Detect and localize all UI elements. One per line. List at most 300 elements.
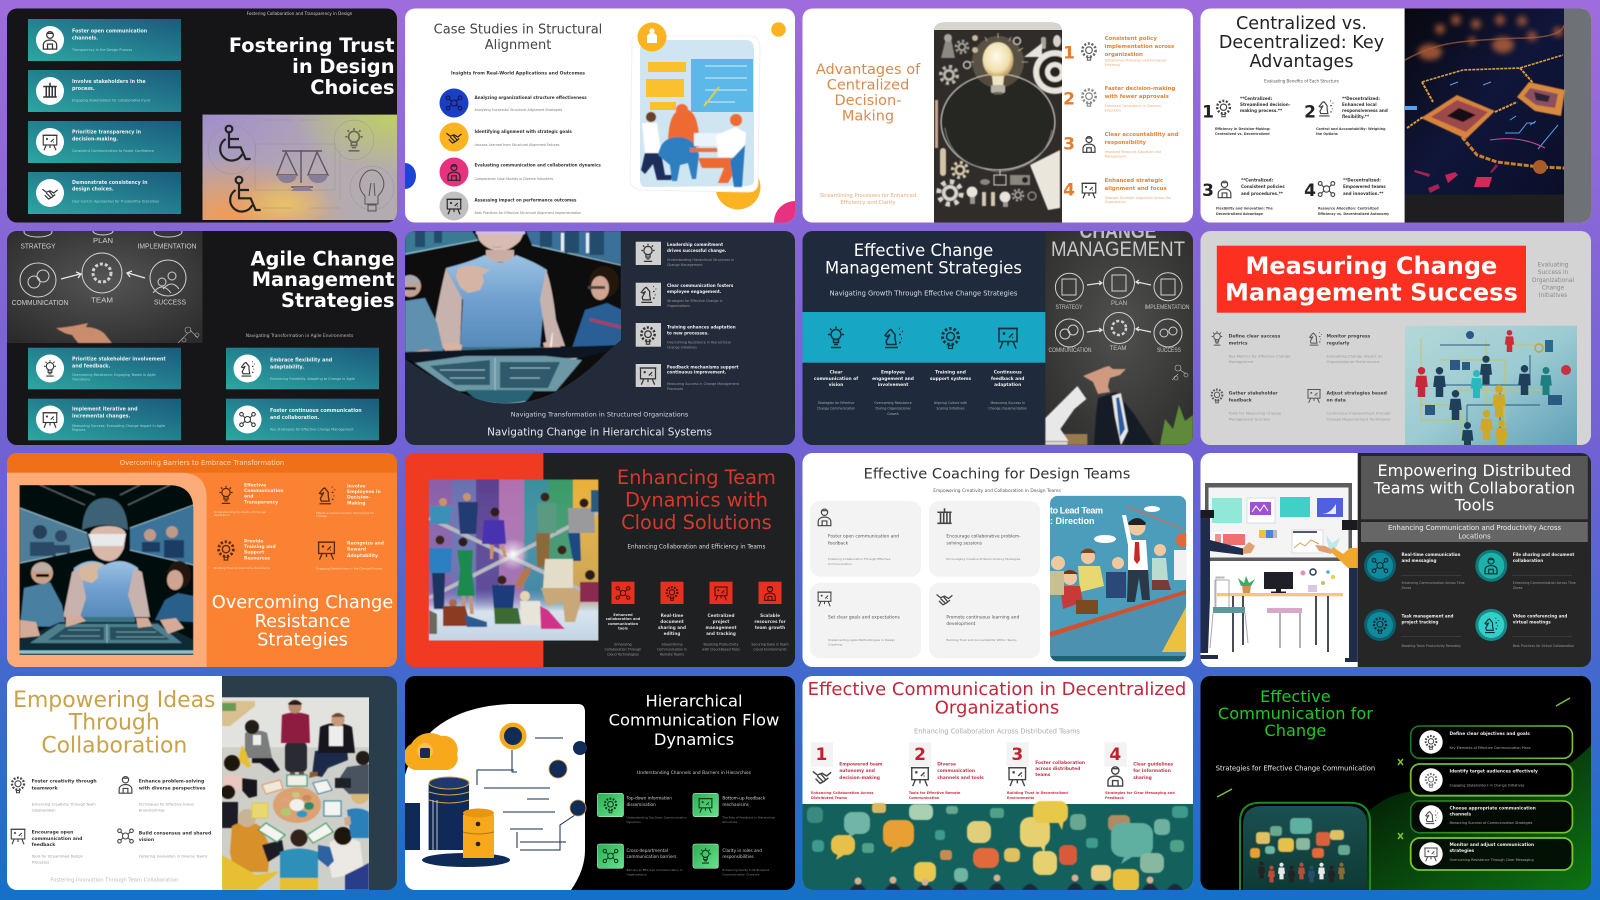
item 2: Enhance problem-solving [139,779,204,785]
card: flexibility: Embrace flexibility and [270,358,333,364]
item 2: Identifying alignment with strategic goals [474,129,572,134]
item 4: virtual meetings [1513,619,1551,624]
column 1 [814,370,858,410]
item 4: Organization [1105,200,1126,204]
item 4 [440,192,581,220]
column 2 [872,370,914,416]
item 4 [693,844,769,877]
item 2: Brainstorming [139,809,164,813]
item 1 [1411,726,1572,758]
title: Management [252,268,394,291]
item 4: Adaptability [347,553,378,559]
item 1: Foster creativity through [32,779,97,785]
item 1: Understanding Top-Down Communication [626,816,687,820]
image: chalkboard change management [1045,220,1193,445]
card: consistency: User-Centric Approaches for Trustworthy Outcomes [72,200,159,204]
column 3: Training and [935,370,966,376]
item 4: Monitor and adjust communication [1450,842,1534,848]
card 2 [929,501,1040,577]
panel: Centralized vs. Decentralized [1200,8,1591,222]
item 2: The Role of Feedback in Hierarchical [721,816,775,820]
item 1: Management [1229,359,1254,364]
panel: Hierarchical Communication Flow Dynamics [404,676,795,890]
subtitle: Navigating Growth Through Effective Change Strategies [830,290,1018,298]
item 3: Evaluating communication and collaboration dynamics [474,162,601,168]
item 1: Streamlined Processes and Increased [1105,58,1166,62]
item 3: channels [1450,812,1472,818]
panel: Case Studies in Structural Alignment [405,8,795,222]
panel: Agile Change Management Strategies [7,227,397,445]
item 1: Streamlined decision- [1240,102,1291,107]
panel: Overcoming Change Resistance Strategies [7,453,397,667]
item 2: Techniques for Effective Group [138,803,194,807]
column 2: Remote Teams [660,652,684,656]
card: iterative changes: Implement iterative and [72,407,138,413]
card: flexibility: Embracing Flexibility: Adapting to Change in Agile [270,377,355,381]
card 4 [929,583,1040,658]
item 1: autonomy and [839,768,875,774]
title: Effective Coaching for Design Teams [864,466,1130,482]
card: open communication: Transparency in the Design Process [71,48,132,52]
item 2: collaboration [1513,558,1543,563]
item 3: Consistent policies [1241,184,1285,189]
item 1 [1212,331,1291,364]
panel: Fostering Trust in Design Choices [7,8,397,222]
item 3 [636,323,736,350]
subtitle: Strategies for Effective Change Communication [1216,765,1375,773]
item 2: 2 [1304,102,1316,122]
card: stakeholder involvement: and feedback. [72,363,110,369]
image: chalkboard diagram: STRATEGY [20,244,56,250]
item 4: Adjust strategies based [1326,390,1387,396]
item 2: Effective Communication Techniques for [316,511,375,515]
item 3: Decentralized Advantage [1216,212,1264,216]
card 4: development [946,621,976,627]
title: Effective Change [854,241,993,260]
item 4: Best Practices for Effective Structural Alignment Implementation [474,211,581,215]
item 4: strategies [1450,848,1475,854]
item 2 [1063,86,1175,112]
item 2: Enhanced Consistency in Decision [1105,104,1161,108]
column 1: Clear [830,370,843,376]
card: open communication [28,19,181,61]
item 1: Key Metrics for Effective Change [1229,353,1291,358]
title: Management Strategies [825,258,1022,277]
item 4: Continuous Improvement through [1326,411,1391,416]
item 3: Training and [244,544,276,550]
column 4: Securing Data in Team [751,642,789,646]
item 4: Efficiency vs. Decentralized Autonomy [1318,212,1390,216]
card: flexibility: adaptability. [270,364,304,370]
item 1: Understanding the Roots of Change [214,510,266,514]
item 1: and messaging [1402,558,1436,563]
card 3 [810,583,921,658]
item 1 [1063,36,1174,67]
column 1: Collaboration Through [605,648,641,652]
item 1: metrics [1229,340,1248,346]
title: Resistance [255,611,350,632]
item 4: Build consensus and shared [139,831,211,837]
column 3: Scaling Initiatives [936,406,965,410]
card: transparency: Prioritize transparency in [72,130,142,136]
item 2: Identify target audiences effectively [1450,768,1538,774]
card: consistency [28,172,181,214]
image: light bulb and tools [934,22,1062,222]
card: involve stakeholders [28,70,181,112]
column 1: tools [618,626,628,630]
item 1: 1 [815,745,827,765]
subtitle band: Locations [1458,533,1491,541]
card: continuous communication: and collaboration. [270,415,319,421]
item 2 [440,122,572,152]
title: Empowering Ideas [13,688,215,713]
image: leader with futuristic visor [19,485,194,655]
subtitle band [1361,522,1588,542]
item 3 [440,158,601,186]
item 3 [1212,390,1282,421]
image: team climbing cartoon: : Direction [1050,516,1095,526]
card: flexibility [226,348,379,389]
title: Enhancing Team [617,466,776,489]
card: open communication: Foster open communication [72,29,148,35]
item 4: continuous improvement. [667,370,727,374]
title: Advantages of [816,62,921,78]
subtitle: Overcoming Barriers to Embrace Transformation [120,459,284,467]
item 2: Tools for Effective Remote [909,791,961,795]
item 2: Clear communication fosters [667,283,734,288]
item 1: Communication [244,488,283,494]
item 1: Transparency [244,499,278,505]
column 4 [988,370,1027,410]
column 2: sharing and [658,625,686,630]
panel: Empowering Distributed Teams [1200,453,1592,667]
teal icon band [802,312,1046,363]
title banner: Management Success [1225,279,1518,307]
item 3: Support [244,550,265,556]
item 1: 1 [1202,102,1214,122]
side strip [1564,8,1591,222]
item 4: Communication Channels [722,873,760,877]
item 2: the Options [1316,132,1338,136]
item 2: Evaluating Change Impact on [1326,353,1383,358]
item 2 [909,742,984,800]
item 2: with diverse perspectives [139,786,206,792]
item 3: Provide [244,538,263,544]
title: Strategies [281,289,394,312]
item 3: Flexibility and Innovation: The [1216,206,1274,210]
image: team climbing cartoon: to Lead Team [1050,505,1103,515]
item 2: Enhanced local [1342,102,1377,107]
item 4: 4 [1304,181,1316,201]
subtitle: Understanding Channels and Barriers in Hierarchies [637,770,752,776]
item 3 [1364,609,1461,648]
item 2: Enhancing Communication Across Time [1513,581,1576,585]
item 4 [1104,742,1175,800]
item 2: Execution [1105,108,1121,112]
column 2: involvement [878,382,908,388]
item 2: Zones [1513,586,1523,590]
item 4: Assessing impact on performance outcomes [474,198,577,202]
item 4: and innovation.** [1343,191,1384,196]
item 1: Distributed Teams [811,796,847,800]
column 1: Cloud Technologies [607,652,639,656]
item 1: 1 [1063,44,1075,64]
column 2: Growth [887,412,899,416]
item 3: Environments [1007,796,1034,800]
item 1: Key Elements of Effective Communication Plans [1450,746,1531,750]
title: Fostering Trust [229,34,394,57]
item 2 [316,483,381,518]
image: chalkboard change management: SUCCESS [1157,348,1181,354]
title: Dynamics [654,730,734,749]
item 3: Organizations [626,873,647,877]
card: involve stakeholders: Engaging Stakeholders for Collaborative Input [72,98,151,102]
column 3: support systems [930,376,971,382]
item 2: **Decentralized: [1342,96,1380,101]
item 1 [811,742,883,800]
item 3: Choose appropriate communication [1450,806,1536,812]
item 3 [1411,801,1572,833]
item 1: making process.** [1240,108,1283,113]
item 2: Monitor progress [1326,333,1371,339]
item 2: responsiveness and [1342,108,1388,113]
column 1: Change Communication [817,406,855,410]
item 1: Enhancing Collaboration Across [811,791,874,795]
item 3: Management Success [1229,416,1270,421]
image: chalkboard change management: PLAN [1111,301,1127,307]
column 4: Scalable [760,613,780,618]
item 1: Enhancing Creativity Through Team [32,803,96,807]
title: Effective Communication in Decentralized [808,679,1186,700]
card 1: feedback [828,540,849,546]
column 2: engagement and [872,376,914,382]
card: consistency: design choices. [72,187,114,193]
item 2: Communication [909,796,940,800]
item 4: Empowered teams [1343,184,1386,189]
item 4: for information [1133,768,1171,774]
item 1: Zones [1402,586,1412,590]
title banner: Measuring Change [1245,252,1497,280]
column 2: Real-time [661,613,684,618]
title: Centralized vs. [1236,14,1367,34]
item 2 [1411,764,1572,796]
column 1 [605,582,641,656]
item 4: 4 [1063,180,1075,200]
title: Change [1264,721,1326,740]
subtitle: Organizational [1532,278,1574,284]
item 2: mechanisms [722,802,749,807]
item 1 [440,88,587,118]
subtitle: Success in [1538,270,1569,276]
column 3: Aligning Culture with [934,401,967,405]
item 3 [1202,178,1285,216]
subtitle: Streamlining Processes for Enhanced [820,193,916,199]
item 4: **Decentralized: [1343,178,1381,182]
title header: Teams with Collaboration [1373,478,1575,497]
item 4: Best Practices for Virtual Collaboration [1513,644,1574,648]
title: Agile Change [250,247,394,270]
item 2: Bottom-up feedback [722,796,766,800]
column 2: Streamlining [662,642,682,646]
item 2: Strategies for Effective Change in [667,299,723,303]
item 2: Decision- [347,495,371,501]
card: involve stakeholders: process. [72,86,95,92]
column 2: document [660,619,684,624]
item 3: Gather stakeholder [1229,390,1278,396]
title: Organizations [935,698,1059,718]
card: transparency: Consistent Communication to Foster Confidence [72,149,154,153]
item 3: feedback [1229,397,1253,403]
item 3: Boosting Team Productivity Remotely [1402,644,1461,648]
item 1 [1202,96,1291,136]
column 2: Communication in [657,648,687,652]
column 2: Employee [881,370,905,376]
panel: Advantages of Centralized Decision-Making [802,8,1193,223]
image: team circle from above [221,697,370,890]
item 2: regularly [1326,340,1350,346]
item 3: Measuring Success of Communication Strategies [1450,821,1533,825]
illustration: team at dashboard [630,22,760,192]
item 1 [1364,550,1465,590]
column 1: communication [608,622,639,626]
title: Advantages [1249,52,1354,72]
column 4: Cloud Environments [753,648,787,652]
item 2 [693,793,775,824]
item 2 [1310,332,1383,364]
item 2 [119,777,206,813]
item 3: 3 [1202,181,1214,201]
image: chalkboard change management: TEAM [1110,346,1126,352]
card: stakeholder involvement: Prioritize stakeholder involvement [72,356,166,362]
item 3: Processes [32,860,49,864]
item 3 [10,829,83,864]
item 1: decision-making [839,775,880,781]
item 1: Efficiency [1105,63,1121,67]
title header: Tools [1454,496,1494,515]
title: Through [68,711,160,736]
title: Choices [310,76,394,99]
subtitle: Empowering Creativity and Collaboration in Design Teams [933,488,1062,494]
column 2 [657,582,687,656]
item 3 [1063,132,1179,158]
image: digital chain network [1405,8,1565,222]
subtitle: Efficiency and Clarity [841,200,895,206]
item 2: Faster decision-making [1105,86,1175,92]
decorative shapes [405,22,795,222]
title: Decision- [835,93,901,109]
item 4: Fostering Innovation in Diverse Teams [139,854,207,858]
image: chalkboard diagram [7,227,202,343]
item 1: Change Management [667,263,703,267]
item 3: Building Trust in Decentralized [1007,791,1068,795]
subtitle: Fostering Collaboration and Transparency in Design [247,11,353,16]
panel: Measuring Change Management Success [1200,231,1591,450]
item 1: Leadership commitment [667,242,723,247]
item 1: Effective [244,482,266,488]
illustration: team at dashboard [1200,483,1358,662]
item 3: Improved Resource Allocation and [1105,150,1161,154]
item 1: Efficiency in Decision-Making: [1215,127,1270,131]
card: transparency [28,121,181,163]
item 2: channels and tools [937,775,984,781]
title: Hierarchical [645,692,743,710]
item 3 [597,844,683,877]
image: leadership team at holographic table [399,231,622,406]
column 4: Continuous [994,370,1022,376]
panel: Enhancing Team Dynamics with Cloud Solutions [405,453,795,667]
title: Navigating Change in Hierarchical Systems [487,427,712,439]
card: stakeholder involvement: Transitions [71,378,90,382]
item 1: Centralized vs. Decentralized [1215,132,1270,136]
image: chalkboard change management: COMMUNICATION [1048,348,1092,354]
column 1: Enhanced [613,613,633,617]
item 3: **Centralized: [1241,178,1274,182]
item 2: Control and Accountability: Weighing [1316,127,1386,131]
column 3: and tracking [706,631,736,636]
image: crowd with speech bubbles [802,801,1193,891]
item 1: Understanding Hierarchical Structures in [667,258,734,262]
card: transparency: decision-making. [72,137,118,143]
title: Decentralized: Key [1219,33,1384,53]
subtitle: Enhancing Collaboration Across Distributed Teams [914,727,1081,735]
title: Strategies [257,630,348,651]
image: accessibility and justice icons [202,115,397,220]
item 2: Lessons Learned from Structural Alignment Failures [474,143,560,147]
item 2: File sharing and document [1513,552,1574,557]
decorative sparks [1217,698,1570,839]
item 4: Resource Allocation: Centralized [1318,206,1379,210]
title: Cloud Solutions [621,511,772,534]
item 1: Dynamics [626,820,641,824]
card: iterative changes [28,399,181,440]
item 4 [1307,390,1391,421]
item 3: 3 [1011,745,1023,765]
item 4 [118,829,211,858]
title banner [1217,246,1526,313]
item 2: 2 [1063,90,1075,110]
panel: Effective Coaching for Design Teams [802,453,1193,667]
item 3: Tools for Streamlined Design [31,854,83,858]
item 3: feedback [32,842,56,848]
card 4: Promote continuous learning and [946,614,1019,620]
card: continuous communication: Foster continuous communication [270,408,362,414]
column 2: Overcoming Resistance [874,401,912,405]
item 4: Reward [347,546,366,552]
subtitle: Evaluating [1538,262,1569,268]
item 1: drives successful change. [667,248,727,253]
column 4 [751,582,789,652]
item 3: Overcoming Resistance in Hierarchical [667,340,731,344]
item 2: Employees in [347,489,381,495]
item 1: dissemination [626,802,656,807]
subtitle: Navigating Transformation in Structured Organizations [511,411,689,419]
title: in Design [292,55,394,78]
title header [1361,456,1588,519]
card 1: Foster open communication and [828,534,899,540]
card: stakeholder involvement [28,348,181,389]
item 4: Strategies for Clear Messaging and [1105,791,1175,795]
item 1: Top-down information [626,796,672,800]
item 3: Foster collaboration [1035,760,1085,766]
item 3: Clear accountability and [1105,132,1179,138]
image: chalkboard change management: CHANGE [1080,220,1156,243]
item 2: Diverse [937,762,956,768]
item 1: Collaboration [32,809,56,813]
illustration: data cylinders and cloud [404,704,587,890]
item 4: Enhanced strategic [1105,178,1163,184]
column 3: Centralized [708,613,734,618]
item 3 [214,538,276,570]
